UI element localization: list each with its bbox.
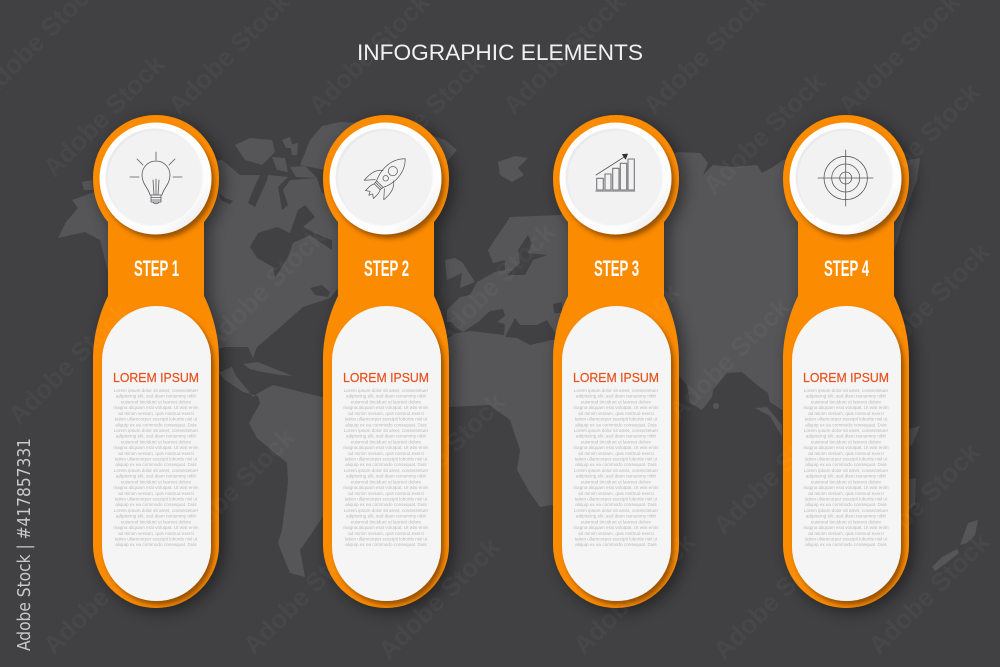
body text: adipiscing elit, sed diam nonummy nibh — [806, 474, 887, 479]
body text: aliquip ex ea commodo consequat. Duis — [805, 542, 887, 547]
body text: tation ullamcorper suscipit lobortis nisl ut — [805, 496, 888, 501]
watermarks: Adobe Stock — [197, 221, 331, 355]
body text: Lorem ipsum dolor sit amet, consectetuer — [574, 508, 659, 513]
body text: tation ullamcorper suscipit lobortis nisl ut — [805, 536, 888, 541]
body text: ad minim veniam, quis nostrud exerci — [578, 411, 654, 416]
body text: aliquip ex ea commodo consequat. Duis — [575, 422, 657, 427]
body text: tation ullamcorper suscipit lobortis nisl ut — [115, 536, 198, 541]
body text: tation ullamcorper suscipit lobortis nisl ut — [115, 457, 198, 462]
body text: ad minim veniam, quis nostrud exerci — [118, 531, 194, 536]
body text: euismod tincidunt ut laoreet dolore — [121, 479, 192, 484]
body text: Lorem ipsum dolor sit amet, consectetuer — [804, 468, 889, 473]
watermarks: Adobe Stock — [167, 421, 301, 555]
body text: aliquip ex ea commodo consequat. Duis — [115, 462, 197, 467]
body text: Lorem ipsum dolor sit amet, consectetuer — [344, 388, 429, 393]
body text: euismod tincidunt ut laoreet dolore — [351, 479, 422, 484]
body text: euismod tincidunt ut laoreet dolore — [121, 519, 192, 524]
body text: adipiscing elit, sed diam nonummy nibh — [116, 434, 197, 439]
body text: magna aliquam erat volutpat. Ut wisi enim — [573, 525, 659, 530]
watermarks: Adobe Stock — [862, 526, 996, 660]
panel heading: LOREM IPSUM — [113, 371, 199, 385]
body text: magna aliquam erat volutpat. Ut wisi enim — [803, 445, 889, 450]
body text: ad minim veniam, quis nostrud exerci — [578, 451, 654, 456]
stock id side label: Adobe Stock | #417857331 — [14, 438, 35, 651]
white text panel — [792, 306, 901, 601]
orange card body — [783, 115, 909, 608]
body text: tation ullamcorper suscipit lobortis nisl ut — [345, 457, 428, 462]
body text: aliquip ex ea commodo consequat. Duis — [805, 422, 887, 427]
body text: adipiscing elit, sed diam nonummy nibh — [576, 474, 657, 479]
step label: STEP 3 — [594, 256, 639, 281]
body text: ad minim veniam, quis nostrud exerci — [348, 491, 424, 496]
body text: magna aliquam erat volutpat. Ut wisi enim — [343, 485, 429, 490]
body text: tation ullamcorper suscipit lobortis nisl ut — [575, 536, 658, 541]
body text: aliquip ex ea commodo consequat. Duis — [115, 542, 197, 547]
body text: ad minim veniam, quis nostrud exerci — [348, 451, 424, 456]
body text: magna aliquam erat volutpat. Ut wisi enim — [803, 525, 889, 530]
body text: ad minim veniam, quis nostrud exerci — [808, 411, 884, 416]
step label: STEP 2 — [364, 256, 409, 281]
body text: Lorem ipsum dolor sit amet, consectetuer — [804, 428, 889, 433]
body text: magna aliquam erat volutpat. Ut wisi enim — [113, 445, 199, 450]
body text: tation ullamcorper suscipit lobortis nisl ut — [345, 417, 428, 422]
step label: STEP 4 — [824, 256, 869, 281]
body text: magna aliquam erat volutpat. Ut wisi enim — [803, 405, 889, 410]
watermarks: Adobe Stock — [427, 216, 561, 350]
body text: magna aliquam erat volutpat. Ut wisi enim — [343, 405, 429, 410]
body text: adipiscing elit, sed diam nonummy nibh — [116, 514, 197, 519]
body text: tation ullamcorper suscipit lobortis nisl ut — [115, 496, 198, 501]
body text: adipiscing elit, sed diam nonummy nibh — [346, 394, 427, 399]
body text: aliquip ex ea commodo consequat. Duis — [805, 502, 887, 507]
body text: Lorem ipsum dolor sit amet, consectetuer — [574, 468, 659, 473]
panel: step 3 — [553, 115, 679, 608]
body text: euismod tincidunt ut laoreet dolore — [581, 399, 652, 404]
panel heading: LOREM IPSUM — [343, 371, 429, 385]
icon: light bulb — [130, 152, 182, 204]
body text: euismod tincidunt ut laoreet dolore — [121, 399, 192, 404]
body text: ad minim veniam, quis nostrud exerci — [578, 491, 654, 496]
orange card body — [93, 115, 219, 608]
body text: aliquip ex ea commodo consequat. Duis — [345, 422, 427, 427]
watermarks: Adobe Stock — [862, 236, 996, 370]
body text: Lorem ipsum dolor sit amet, consectetuer — [114, 428, 199, 433]
orange card body — [323, 115, 449, 608]
white circle badge — [330, 122, 442, 234]
watermarks: Adobe Stock — [552, 276, 686, 410]
body text: tation ullamcorper suscipit lobortis nisl ut — [805, 457, 888, 462]
white text panel — [332, 306, 441, 601]
icon: target — [818, 150, 873, 206]
panel heading: LOREM IPSUM — [803, 371, 889, 385]
body text: tation ullamcorper suscipit lobortis nisl ut — [575, 496, 658, 501]
body text: adipiscing elit, sed diam nonummy nibh — [576, 514, 657, 519]
world map — [58, 122, 978, 590]
body text: magna aliquam erat volutpat. Ut wisi enim — [573, 445, 659, 450]
watermarks: Adobe Stock — [372, 531, 506, 665]
body text: euismod tincidunt ut laoreet dolore — [121, 439, 192, 444]
body text: euismod tincidunt ut laoreet dolore — [351, 439, 422, 444]
body text: tation ullamcorper suscipit lobortis nisl ut — [805, 417, 888, 422]
watermarks: Adobe Stock — [852, 436, 986, 570]
white text panel — [102, 306, 211, 601]
body text: aliquip ex ea commodo consequat. Duis — [575, 542, 657, 547]
watermarks: Adobe Stock — [567, 526, 701, 660]
body text: aliquip ex ea commodo consequat. Duis — [345, 542, 427, 547]
body text: adipiscing elit, sed diam nonummy nibh — [806, 434, 887, 439]
body text: ad minim veniam, quis nostrud exerci — [118, 411, 194, 416]
white circle badge — [560, 122, 672, 234]
white circle badge — [790, 122, 902, 234]
body text: adipiscing elit, sed diam nonummy nibh — [806, 394, 887, 399]
body text: ad minim veniam, quis nostrud exerci — [118, 491, 194, 496]
body text: aliquip ex ea commodo consequat. Duis — [115, 502, 197, 507]
body text: euismod tincidunt ut laoreet dolore — [581, 519, 652, 524]
body text: magna aliquam erat volutpat. Ut wisi enim — [803, 485, 889, 490]
body text: aliquip ex ea commodo consequat. Duis — [805, 462, 887, 467]
body text: Lorem ipsum dolor sit amet, consectetuer — [114, 508, 199, 513]
body text: adipiscing elit, sed diam nonummy nibh — [576, 394, 657, 399]
panel heading: LOREM IPSUM — [573, 371, 659, 385]
body text: adipiscing elit, sed diam nonummy nibh — [116, 474, 197, 479]
body text: adipiscing elit, sed diam nonummy nibh — [346, 434, 427, 439]
body text: adipiscing elit, sed diam nonummy nibh — [346, 474, 427, 479]
body text: aliquip ex ea commodo consequat. Duis — [345, 502, 427, 507]
body text: ad minim veniam, quis nostrud exerci — [348, 531, 424, 536]
body text: magna aliquam erat volutpat. Ut wisi enim — [113, 485, 199, 490]
body text: adipiscing elit, sed diam nonummy nibh — [346, 514, 427, 519]
body text: euismod tincidunt ut laoreet dolore — [581, 479, 652, 484]
icon: growth chart — [596, 154, 634, 191]
body text: ad minim veniam, quis nostrud exerci — [348, 411, 424, 416]
watermarks: Adobe Stock — [37, 526, 171, 660]
body text: magna aliquam erat volutpat. Ut wisi enim — [113, 525, 199, 530]
body text: magna aliquam erat volutpat. Ut wisi enim — [343, 445, 429, 450]
body text: euismod tincidunt ut laoreet dolore — [811, 399, 882, 404]
watermarks: Adobe Stock — [852, 76, 986, 210]
body text: euismod tincidunt ut laoreet dolore — [811, 519, 882, 524]
title: INFOGRAPHIC ELEMENTS — [357, 40, 643, 65]
body text: euismod tincidunt ut laoreet dolore — [351, 399, 422, 404]
body text: tation ullamcorper suscipit lobortis nisl ut — [575, 457, 658, 462]
body text: tation ullamcorper suscipit lobortis nisl ut — [345, 496, 428, 501]
body text: ad minim veniam, quis nostrud exerci — [118, 451, 194, 456]
body text: magna aliquam erat volutpat. Ut wisi enim — [343, 525, 429, 530]
body text: euismod tincidunt ut laoreet dolore — [351, 519, 422, 524]
watermarks: Adobe Stock — [707, 406, 841, 540]
body text: Lorem ipsum dolor sit amet, consectetuer — [804, 388, 889, 393]
body text: magna aliquam erat volutpat. Ut wisi enim — [113, 405, 199, 410]
body text: magna aliquam erat volutpat. Ut wisi enim — [573, 405, 659, 410]
watermarks: Adobe Stock — [357, 48, 491, 182]
body text: ad minim veniam, quis nostrud exerci — [578, 531, 654, 536]
watermarks: Adobe Stock — [37, 48, 171, 182]
body text: Lorem ipsum dolor sit amet, consectetuer — [344, 508, 429, 513]
body text: Lorem ipsum dolor sit amet, consectetuer — [344, 428, 429, 433]
panel: step 4 — [783, 115, 909, 608]
body text: aliquip ex ea commodo consequat. Duis — [575, 462, 657, 467]
watermarks: Adobe Stock — [237, 526, 371, 660]
watermarks: Adobe Stock — [2, 296, 136, 430]
orange card body — [553, 115, 679, 608]
panel: step 1 — [93, 115, 219, 608]
step label: STEP 1 — [134, 256, 179, 281]
body text: aliquip ex ea commodo consequat. Duis — [115, 422, 197, 427]
body text: ad minim veniam, quis nostrud exerci — [808, 531, 884, 536]
body text: Lorem ipsum dolor sit amet, consectetuer — [114, 468, 199, 473]
white circle badge — [100, 122, 212, 234]
watermarks: Adobe Stock — [377, 386, 511, 520]
body text: adipiscing elit, sed diam nonummy nibh — [806, 514, 887, 519]
body text: euismod tincidunt ut laoreet dolore — [811, 439, 882, 444]
body text: ad minim veniam, quis nostrud exerci — [808, 491, 884, 496]
body text: Lorem ipsum dolor sit amet, consectetuer — [344, 468, 429, 473]
icon: rocket — [359, 149, 415, 205]
watermarks: Adobe Stock — [662, 291, 796, 425]
watermarks: Adobe Stock — [697, 66, 831, 200]
body text: Lorem ipsum dolor sit amet, consectetuer — [574, 428, 659, 433]
body text: tation ullamcorper suscipit lobortis nisl ut — [345, 536, 428, 541]
body text: Lorem ipsum dolor sit amet, consectetuer — [804, 508, 889, 513]
white text panel — [562, 306, 671, 601]
body text: tation ullamcorper suscipit lobortis nisl ut — [575, 417, 658, 422]
body text: Lorem ipsum dolor sit amet, consectetuer — [114, 388, 199, 393]
body text: euismod tincidunt ut laoreet dolore — [581, 439, 652, 444]
body text: ad minim veniam, quis nostrud exerci — [808, 451, 884, 456]
body text: tation ullamcorper suscipit lobortis nisl ut — [115, 417, 198, 422]
body text: aliquip ex ea commodo consequat. Duis — [575, 502, 657, 507]
body text: Lorem ipsum dolor sit amet, consectetuer — [574, 388, 659, 393]
panel: step 2 — [323, 115, 449, 608]
body text: adipiscing elit, sed diam nonummy nibh — [116, 394, 197, 399]
watermarks: Adobe Stock — [707, 531, 841, 665]
body text: adipiscing elit, sed diam nonummy nibh — [576, 434, 657, 439]
body text: aliquip ex ea commodo consequat. Duis — [345, 462, 427, 467]
body text: magna aliquam erat volutpat. Ut wisi enim — [573, 485, 659, 490]
body text: euismod tincidunt ut laoreet dolore — [811, 479, 882, 484]
